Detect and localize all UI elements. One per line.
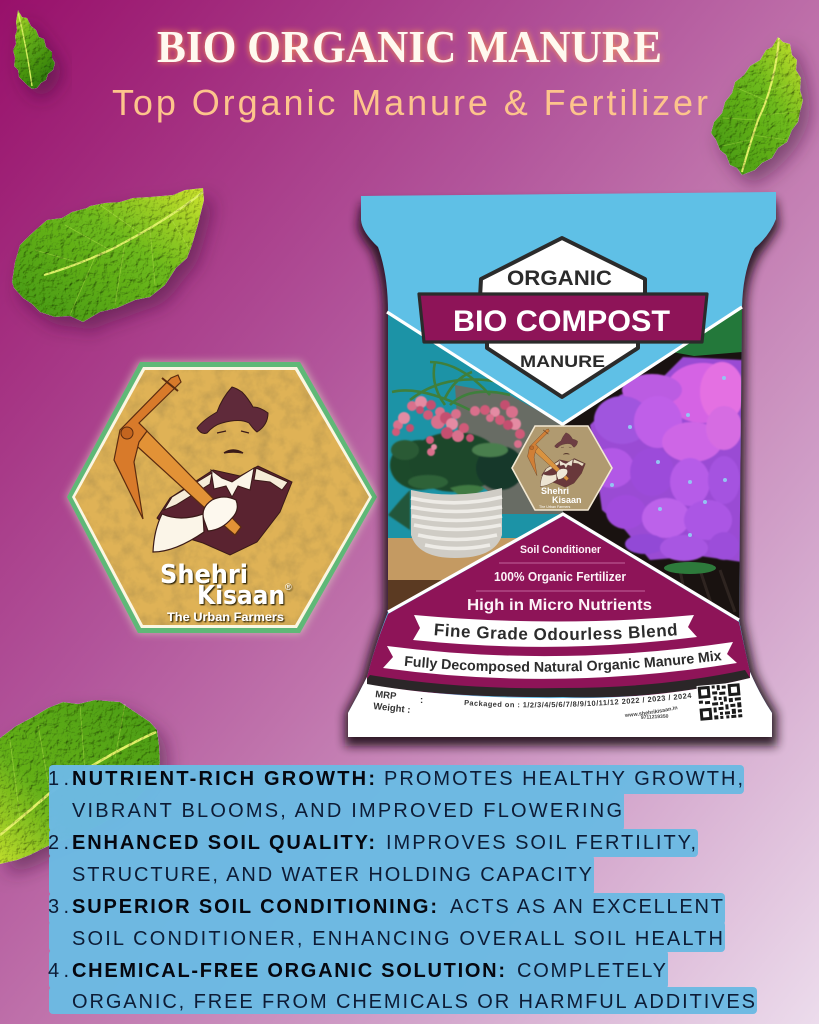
label: top hexagon organic manure: MANURE: [520, 352, 605, 371]
brand name: The Urban Farmers: [167, 610, 284, 624]
label: top hexagon organic manure: [419, 238, 707, 397]
title: BIO ORGANIC MANURE: [157, 21, 662, 72]
white footer: :: [420, 695, 423, 706]
item 1: NUTRIENT-RICH GROWTH:: [72, 768, 375, 790]
white footer: Packaged on : 1/2/3/4/5/6/7/8/9/10/11/12 2022 / 2023 / 2024: [464, 692, 692, 708]
ribbon: fully decomposed: [383, 642, 737, 679]
small logo on bag: Kisaan: [552, 495, 582, 505]
label: top hexagon organic manure: ORGANIC: [507, 267, 612, 290]
logo badge: Shehri Kisaan: [66, 361, 378, 634]
purple label panel: High in Micro Nutrients: [467, 597, 652, 614]
item 3: ACTS AS AN EXCELLENT: [450, 896, 723, 918]
brand name: [160, 560, 292, 624]
photo: potted plant: [388, 300, 568, 610]
item 2: STRUCTURE, AND WATER HOLDING CAPACITY: [72, 864, 592, 886]
brand name: Kisaan: [197, 581, 285, 611]
purple label panel: 100% Organic Fertilizer: [494, 570, 626, 584]
item 4: 4.: [48, 960, 69, 982]
brand name: ®: [285, 582, 292, 592]
item 4: [48, 960, 755, 1013]
item 2: IMPROVES SOIL FERTILITY,: [386, 832, 696, 854]
leaf: top right: [711, 37, 803, 175]
product bag: [337, 192, 786, 754]
small logo on bag: The Urban Farmers: [539, 505, 571, 509]
leaf: large left: [12, 188, 204, 322]
white footer: www.shehrikisaan.in: [624, 706, 678, 717]
purple label panel: Soil Conditioner: [520, 544, 602, 556]
white footer: MRP: [375, 689, 397, 702]
photo: hydrangea: [563, 300, 744, 625]
item 4: CHEMICAL-FREE ORGANIC SOLUTION:: [72, 960, 505, 982]
white footer: 9711219350: [641, 714, 669, 721]
white footer: Weight :: [373, 701, 411, 716]
brand name: Shehri: [160, 560, 248, 590]
highlight background: [49, 765, 757, 1014]
small logo on bag: [512, 426, 612, 510]
item 2: [48, 832, 696, 886]
QR code: [697, 682, 743, 722]
white footer: [348, 672, 772, 737]
item 3: SUPERIOR SOIL CONDITIONING:: [72, 896, 437, 918]
bag body: [348, 192, 776, 737]
label: top hexagon organic manure: BIO COMPOST: [453, 305, 670, 338]
leaf: bottom left: [0, 700, 160, 864]
item 4: COMPLETELY: [517, 960, 666, 982]
purple label panel: [363, 516, 752, 697]
small logo on bag: Shehri: [541, 486, 569, 496]
item 3: [48, 896, 723, 950]
item 2: 2.: [48, 832, 69, 854]
item 3: 3.: [48, 896, 69, 918]
item 1: [48, 768, 743, 822]
leaf: top left: [13, 10, 55, 89]
bag shadow: [345, 200, 779, 746]
subtitle: Top Organic Manure & Fertilizer: [112, 82, 708, 123]
benefits list: [48, 765, 757, 1014]
item 4: ORGANIC, FREE FROM CHEMICALS OR HARMFUL ADDITIVES: [72, 991, 755, 1013]
pot: [411, 488, 502, 558]
item 3: SOIL CONDITIONER, ENHANCING OVERALL SOIL HEALTH: [72, 928, 723, 950]
item 2: ENHANCED SOIL QUALITY:: [72, 832, 375, 854]
chevron dividers: [387, 307, 742, 620]
ribbon: fine grade: [413, 615, 697, 647]
illustration: farmer with pickaxe: [114, 375, 292, 555]
ribbon: fine grade: Fine Grade Odourless Blend: [434, 623, 677, 640]
item 1: PROMOTES HEALTHY GROWTH,: [384, 768, 743, 790]
item 1: VIBRANT BLOOMS, AND IMPROVED FLOWERING: [72, 800, 622, 822]
item 1: 1.: [48, 768, 69, 790]
ribbon: fully decomposed: Fully Decomposed Natural Organic Manure Mix: [404, 650, 722, 674]
